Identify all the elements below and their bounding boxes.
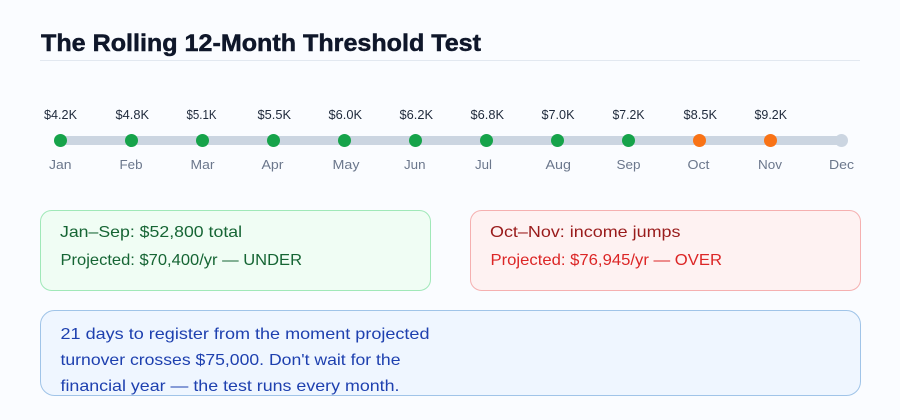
title: The Rolling 12-Month Threshold Test (41, 30, 481, 57)
monthly income values: $6.2K (400, 108, 434, 122)
callout text: 21 days to register from the moment projected (60, 326, 430, 343)
callout text (60, 326, 430, 395)
month markers (54, 134, 848, 147)
month labels (49, 157, 855, 172)
monthly income values (44, 108, 788, 122)
monthly income values: $5.5K (258, 108, 292, 122)
month labels: Jun (404, 157, 426, 172)
monthly income values: $4.2K (44, 108, 78, 122)
projected under: Projected: $70,400/yr — UNDER (60, 252, 302, 269)
month labels: Sep (616, 157, 640, 172)
monthly income values: $9.2K (754, 108, 788, 122)
Jan-Sep total: Jan–Sep: $52,800 total (60, 224, 242, 241)
callout text: turnover crosses $75,000. Don't wait for the (60, 352, 401, 369)
monthly income values: $5.1K (186, 108, 217, 122)
Oct-Nov note: Oct–Nov: income jumps (490, 224, 680, 241)
projected over: Projected: $76,945/yr — OVER (490, 252, 722, 269)
panel: registration callout (40, 310, 860, 396)
month labels: Oct (688, 157, 710, 172)
monthly income values: $7.0K (542, 108, 575, 122)
panel: under threshold (40, 210, 430, 290)
month labels: May (332, 157, 360, 172)
monthly income values: $4.8K (116, 108, 150, 122)
monthly income values: $7.2K (612, 108, 645, 122)
month labels: Aug (546, 157, 571, 172)
month labels: Apr (262, 157, 284, 172)
month labels: Feb (120, 157, 142, 172)
month labels: Dec (829, 157, 855, 172)
panel: over threshold (470, 210, 860, 290)
monthly income values: $6.0K (328, 108, 363, 122)
month labels: Nov (758, 157, 783, 172)
monthly income values: $6.8K (470, 108, 505, 122)
month labels: Jan (49, 157, 72, 172)
callout text: financial year — the test runs every month. (60, 378, 400, 395)
month labels: Jul (475, 157, 492, 172)
timeline track (60, 136, 842, 145)
timeline chart (44, 108, 855, 172)
month labels: Mar (190, 157, 215, 172)
monthly income values: $8.5K (684, 108, 718, 122)
